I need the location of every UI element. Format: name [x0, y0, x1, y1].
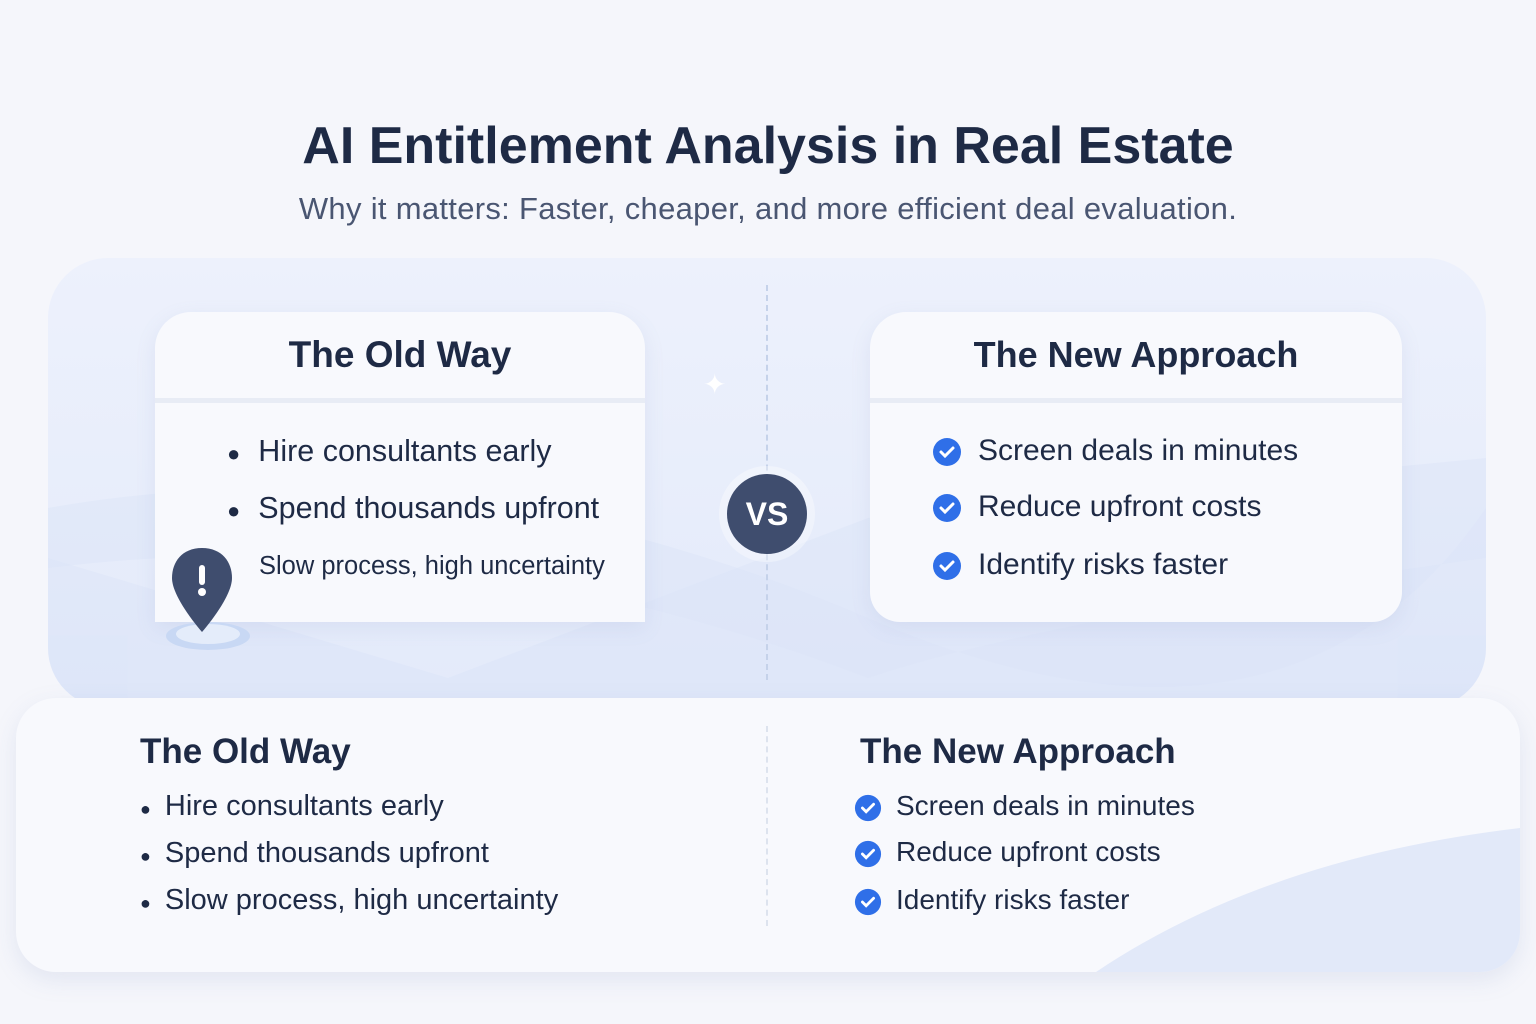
panel: summary bottom: [16, 698, 1520, 972]
summary: new approach: Identify risks faster: [896, 884, 1129, 915]
list: old way: ● Spend thousands upfront: [227, 491, 599, 525]
list: old way: Slow process, high uncertainty: [259, 552, 605, 580]
list: new approach: Reduce upfront costs: [978, 490, 1262, 523]
summary: old way: The Old Way: [140, 732, 351, 771]
list: old way: [227, 434, 605, 580]
summary: old way: ● Spend thousands upfront: [140, 837, 489, 869]
list: new approach: Screen deals in minutes: [978, 434, 1298, 467]
summary: old way: ● Slow process, high uncertainty: [140, 884, 558, 916]
icon: warning pin: [166, 548, 250, 650]
summary: new approach: Reduce upfront costs: [896, 836, 1161, 867]
summary: old way: [140, 732, 558, 916]
card: old way: [155, 312, 645, 622]
panel: comparison background: [48, 258, 1486, 708]
summary: new approach: The New Approach: [860, 732, 1176, 771]
subtitle: Why it matters: Faster, cheaper, and more efficient deal evaluation.: [299, 191, 1237, 226]
badge: vs: VS: [746, 496, 788, 532]
list: new approach: [933, 434, 1298, 581]
heading: old way: The Old Way: [289, 334, 511, 375]
list: new approach: Identify risks faster: [978, 548, 1228, 581]
divider: vertical dashed line top: [766, 285, 768, 680]
list: old way: ● Hire consultants early: [227, 434, 552, 468]
summary: old way: ● Hire consultants early: [140, 790, 444, 822]
summary: new approach: [854, 732, 1195, 916]
title: AI Entitlement Analysis in Real Estate: [302, 117, 1234, 175]
sparkle icon: ✦: [703, 369, 726, 400]
summary: new approach: Screen deals in minutes: [896, 790, 1195, 821]
badge: vs: [727, 474, 807, 554]
heading: new approach: The New Approach: [974, 334, 1298, 375]
card: new approach: [870, 312, 1402, 622]
